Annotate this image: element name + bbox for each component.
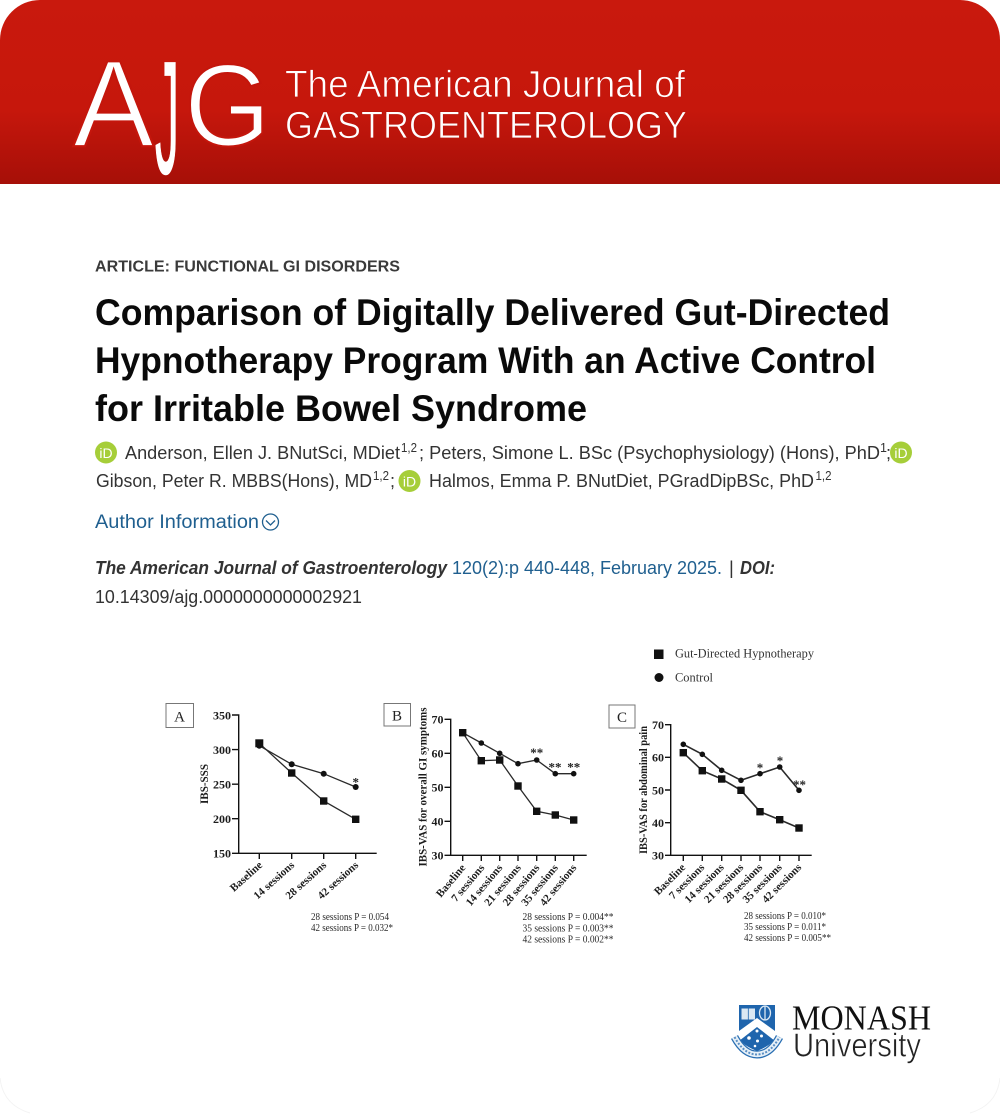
citation: 10.14309/ajg.0000000000002921 <box>95 586 362 607</box>
chart B: ** <box>567 760 580 774</box>
chart B: 14 sessions <box>464 862 506 909</box>
chart B: 42 sessions <box>538 862 580 909</box>
chart A: 28 sessions <box>283 859 330 902</box>
chart B: ** <box>530 745 543 760</box>
chart B: 42 sessions P = 0.002** <box>522 934 614 946</box>
journal name: The American Journal of <box>285 64 685 106</box>
article category: ARTICLE: FUNCTIONAL GI DISORDERS <box>95 258 400 276</box>
chart A: 42 sessions P = 0.032* <box>311 923 393 934</box>
chart A: 28 sessions P = 0.054 <box>311 912 389 923</box>
chart B: 70 <box>432 712 444 726</box>
chart B: 7 sessions <box>449 862 488 904</box>
chart C: 28 sessions P = 0.010* <box>744 911 826 922</box>
chart C: 35 sessions P = 0.011* <box>744 922 826 933</box>
chart C: C <box>617 710 627 726</box>
chart B: 28 sessions P = 0.004** <box>522 912 614 923</box>
authors: Anderson, Ellen J. BNutSci, MDiet <box>125 443 400 463</box>
chart B: 35 sessions <box>519 862 561 909</box>
chart B: 30 <box>432 848 444 862</box>
authors: 1,2 <box>816 469 832 483</box>
chart A: A <box>174 710 185 726</box>
chart C: 30 <box>652 848 664 862</box>
chart B: 21 sessions <box>482 862 524 909</box>
chart B: 60 <box>432 746 444 760</box>
chart B: 40 <box>432 814 444 828</box>
AJG logo: G <box>184 40 270 170</box>
chart C: 21 sessions <box>702 861 747 906</box>
chart B <box>384 704 614 946</box>
chart B: 50 <box>432 780 444 794</box>
article title: Comparison of Digitally Delivered Gut-Directed <box>95 292 890 333</box>
header banner <box>0 0 1000 208</box>
legend: Control <box>675 670 713 684</box>
author information link: Author Information <box>95 512 259 533</box>
chart B: B <box>392 708 402 724</box>
AJG logo: J <box>155 29 179 208</box>
legend <box>654 646 814 684</box>
wordmark <box>792 998 931 1064</box>
chart A: * <box>352 774 359 790</box>
journal name <box>285 64 687 147</box>
chart B: IBS-VAS for overall GI symptoms <box>416 707 430 866</box>
chart B: Baseline <box>434 862 468 900</box>
authors: Gibson, Peter R. MBBS(Hons), MD <box>96 471 372 491</box>
icon: Monash crest <box>734 1005 780 1054</box>
icon: ORCID 3 <box>398 470 420 492</box>
authors: ; Peters, Simone L. BSc (Psychophysiology) (Hons), PhD <box>419 443 880 463</box>
chart A: Baseline <box>228 859 265 894</box>
chart C: 60 <box>652 750 664 764</box>
chart C: 42 sessions P = 0.005** <box>744 933 831 944</box>
Monash University logo <box>734 998 931 1064</box>
chart A: IBS-SSS <box>197 764 211 804</box>
authors: Halmos, Emma P. BNutDiet, PGradDipBSc, PhD <box>429 471 814 491</box>
chart B: 28 sessions <box>501 862 543 909</box>
chart C: 42 sessions <box>760 861 805 906</box>
citation: | <box>729 557 734 578</box>
wordmark: MONASH <box>792 998 931 1038</box>
chart C: * <box>777 753 783 768</box>
chart C: ** <box>793 777 806 792</box>
icon: ORCID 3: iD <box>403 474 416 490</box>
citation <box>95 557 775 607</box>
chart C: Baseline <box>652 862 688 898</box>
authors: ; <box>886 443 891 463</box>
AJG logo <box>73 29 270 208</box>
chart C: 50 <box>652 783 664 797</box>
chart C: IBS-VAS for abdominal pain <box>636 726 650 854</box>
chart A <box>166 704 393 934</box>
icon: ORCID 2 <box>890 442 912 464</box>
chart A: 150 <box>213 846 231 860</box>
chart A: 250 <box>213 778 231 792</box>
chart A: 14 sessions <box>251 859 298 902</box>
authors: 1,2 <box>373 469 389 483</box>
authors: ; <box>390 471 395 491</box>
chart C: 14 sessions <box>682 861 727 906</box>
chart C: * <box>757 760 763 775</box>
icon: ORCID 1: iD <box>99 445 113 461</box>
chart C: 35 sessions <box>740 861 785 906</box>
article title <box>95 292 890 429</box>
icon: ORCID 2: iD <box>894 445 908 461</box>
chart C <box>609 705 831 944</box>
authors <box>95 441 912 492</box>
chart C: 70 <box>652 718 664 732</box>
citation: 120(2):p 440-448, February 2025. <box>452 557 722 578</box>
icon: ORCID 1 <box>95 442 117 464</box>
chart A: 300 <box>213 743 231 757</box>
chart B: ** <box>548 760 562 774</box>
authors: 1 <box>880 441 887 455</box>
journal name: GASTROENTEROLOGY <box>285 105 687 147</box>
AJG logo: A <box>73 36 154 174</box>
citation: The American Journal of Gastroenterology <box>95 557 449 578</box>
legend: Gut-Directed Hypnotherapy <box>675 646 814 660</box>
citation: DOI: <box>740 557 775 578</box>
chart A: 350 <box>213 708 231 722</box>
chart C: 40 <box>652 816 664 830</box>
chart A: 42 sessions <box>315 859 362 902</box>
chart B: 35 sessions P = 0.003** <box>522 924 614 934</box>
article title: for Irritable Bowel Syndrome <box>95 388 587 429</box>
authors: 1,2 <box>401 441 417 455</box>
chart C: 28 sessions <box>721 861 766 906</box>
chart C: 7 sessions <box>667 861 708 902</box>
chart A: 200 <box>213 812 231 826</box>
wordmark: University <box>793 1028 921 1064</box>
article title: Hypnotherapy Program With an Active Control <box>95 340 876 381</box>
